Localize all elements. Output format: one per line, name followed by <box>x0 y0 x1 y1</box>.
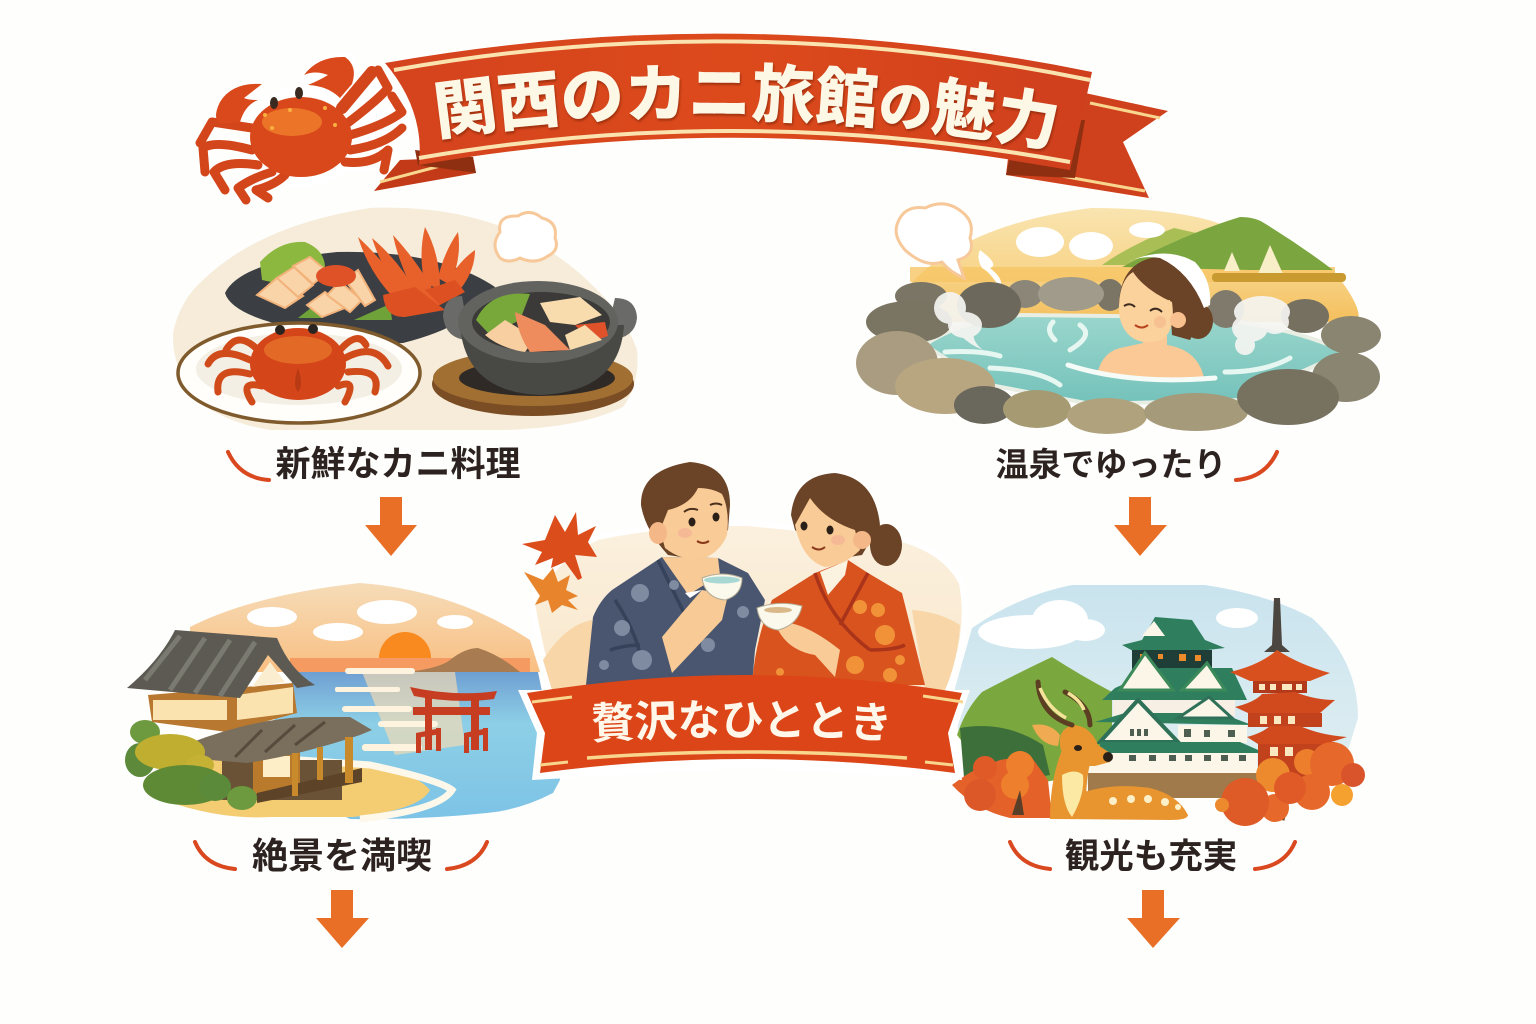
center background <box>532 523 965 690</box>
steam puffs <box>934 292 1290 355</box>
sky <box>190 583 540 672</box>
arrow: onsen down <box>1114 497 1167 556</box>
label: scenic view <box>195 835 487 876</box>
ribbon: luxurious moment <box>518 675 970 780</box>
icon: title crab <box>200 52 402 200</box>
arrow: scenic down <box>316 890 369 948</box>
panel: hot spring <box>856 204 1381 434</box>
autumn trees <box>952 742 1365 826</box>
panel: sightseeing <box>952 585 1365 826</box>
pagoda <box>1230 598 1347 782</box>
woman <box>752 473 925 685</box>
title text: 関西のカニ旅館の魅力 <box>435 62 1059 152</box>
arrow: food down <box>365 497 417 556</box>
label: sightseeing <box>1010 838 1295 876</box>
hot pot <box>432 281 637 416</box>
ribbon text: 贅沢なひととき <box>592 700 887 743</box>
arrow: sightseeing down <box>1127 890 1180 948</box>
back rocks <box>866 277 1381 354</box>
man <box>586 462 765 685</box>
label: hot spring: 温泉でゆったり <box>996 446 1226 483</box>
icon: maple leaves <box>522 512 597 613</box>
water ripples <box>945 322 1290 385</box>
ripple around woman <box>1068 365 1215 380</box>
background hills <box>543 610 960 690</box>
label: sightseeing: 観光も充実 <box>1065 838 1237 876</box>
green hill <box>957 657 1112 790</box>
ryokan building <box>127 630 372 803</box>
label: scenic view: 絶景を満喫 <box>252 835 432 876</box>
panel: fresh crab cuisine <box>173 208 637 430</box>
icon: steam cloud <box>495 212 556 261</box>
sea <box>250 672 560 819</box>
sky and hills <box>905 208 1359 322</box>
panel: luxurious moment <box>518 462 970 780</box>
beach <box>163 760 430 817</box>
panel background <box>173 208 637 430</box>
label: fresh crab cuisine: 新鮮なカニ料理 <box>275 445 521 484</box>
torii gate <box>410 687 497 753</box>
steam wisp <box>978 250 1001 288</box>
title banner <box>374 34 1168 198</box>
deer <box>1032 682 1188 820</box>
bathing woman <box>1097 254 1213 381</box>
bushes <box>125 720 257 810</box>
panel: scenic seaside <box>125 583 560 819</box>
icon: steam cloud <box>896 204 972 278</box>
crab plate <box>178 323 420 423</box>
sashimi platter <box>225 227 495 343</box>
pool water <box>925 315 1345 404</box>
front rocks <box>856 331 1380 434</box>
sky <box>955 585 1358 790</box>
castle <box>1088 617 1265 798</box>
